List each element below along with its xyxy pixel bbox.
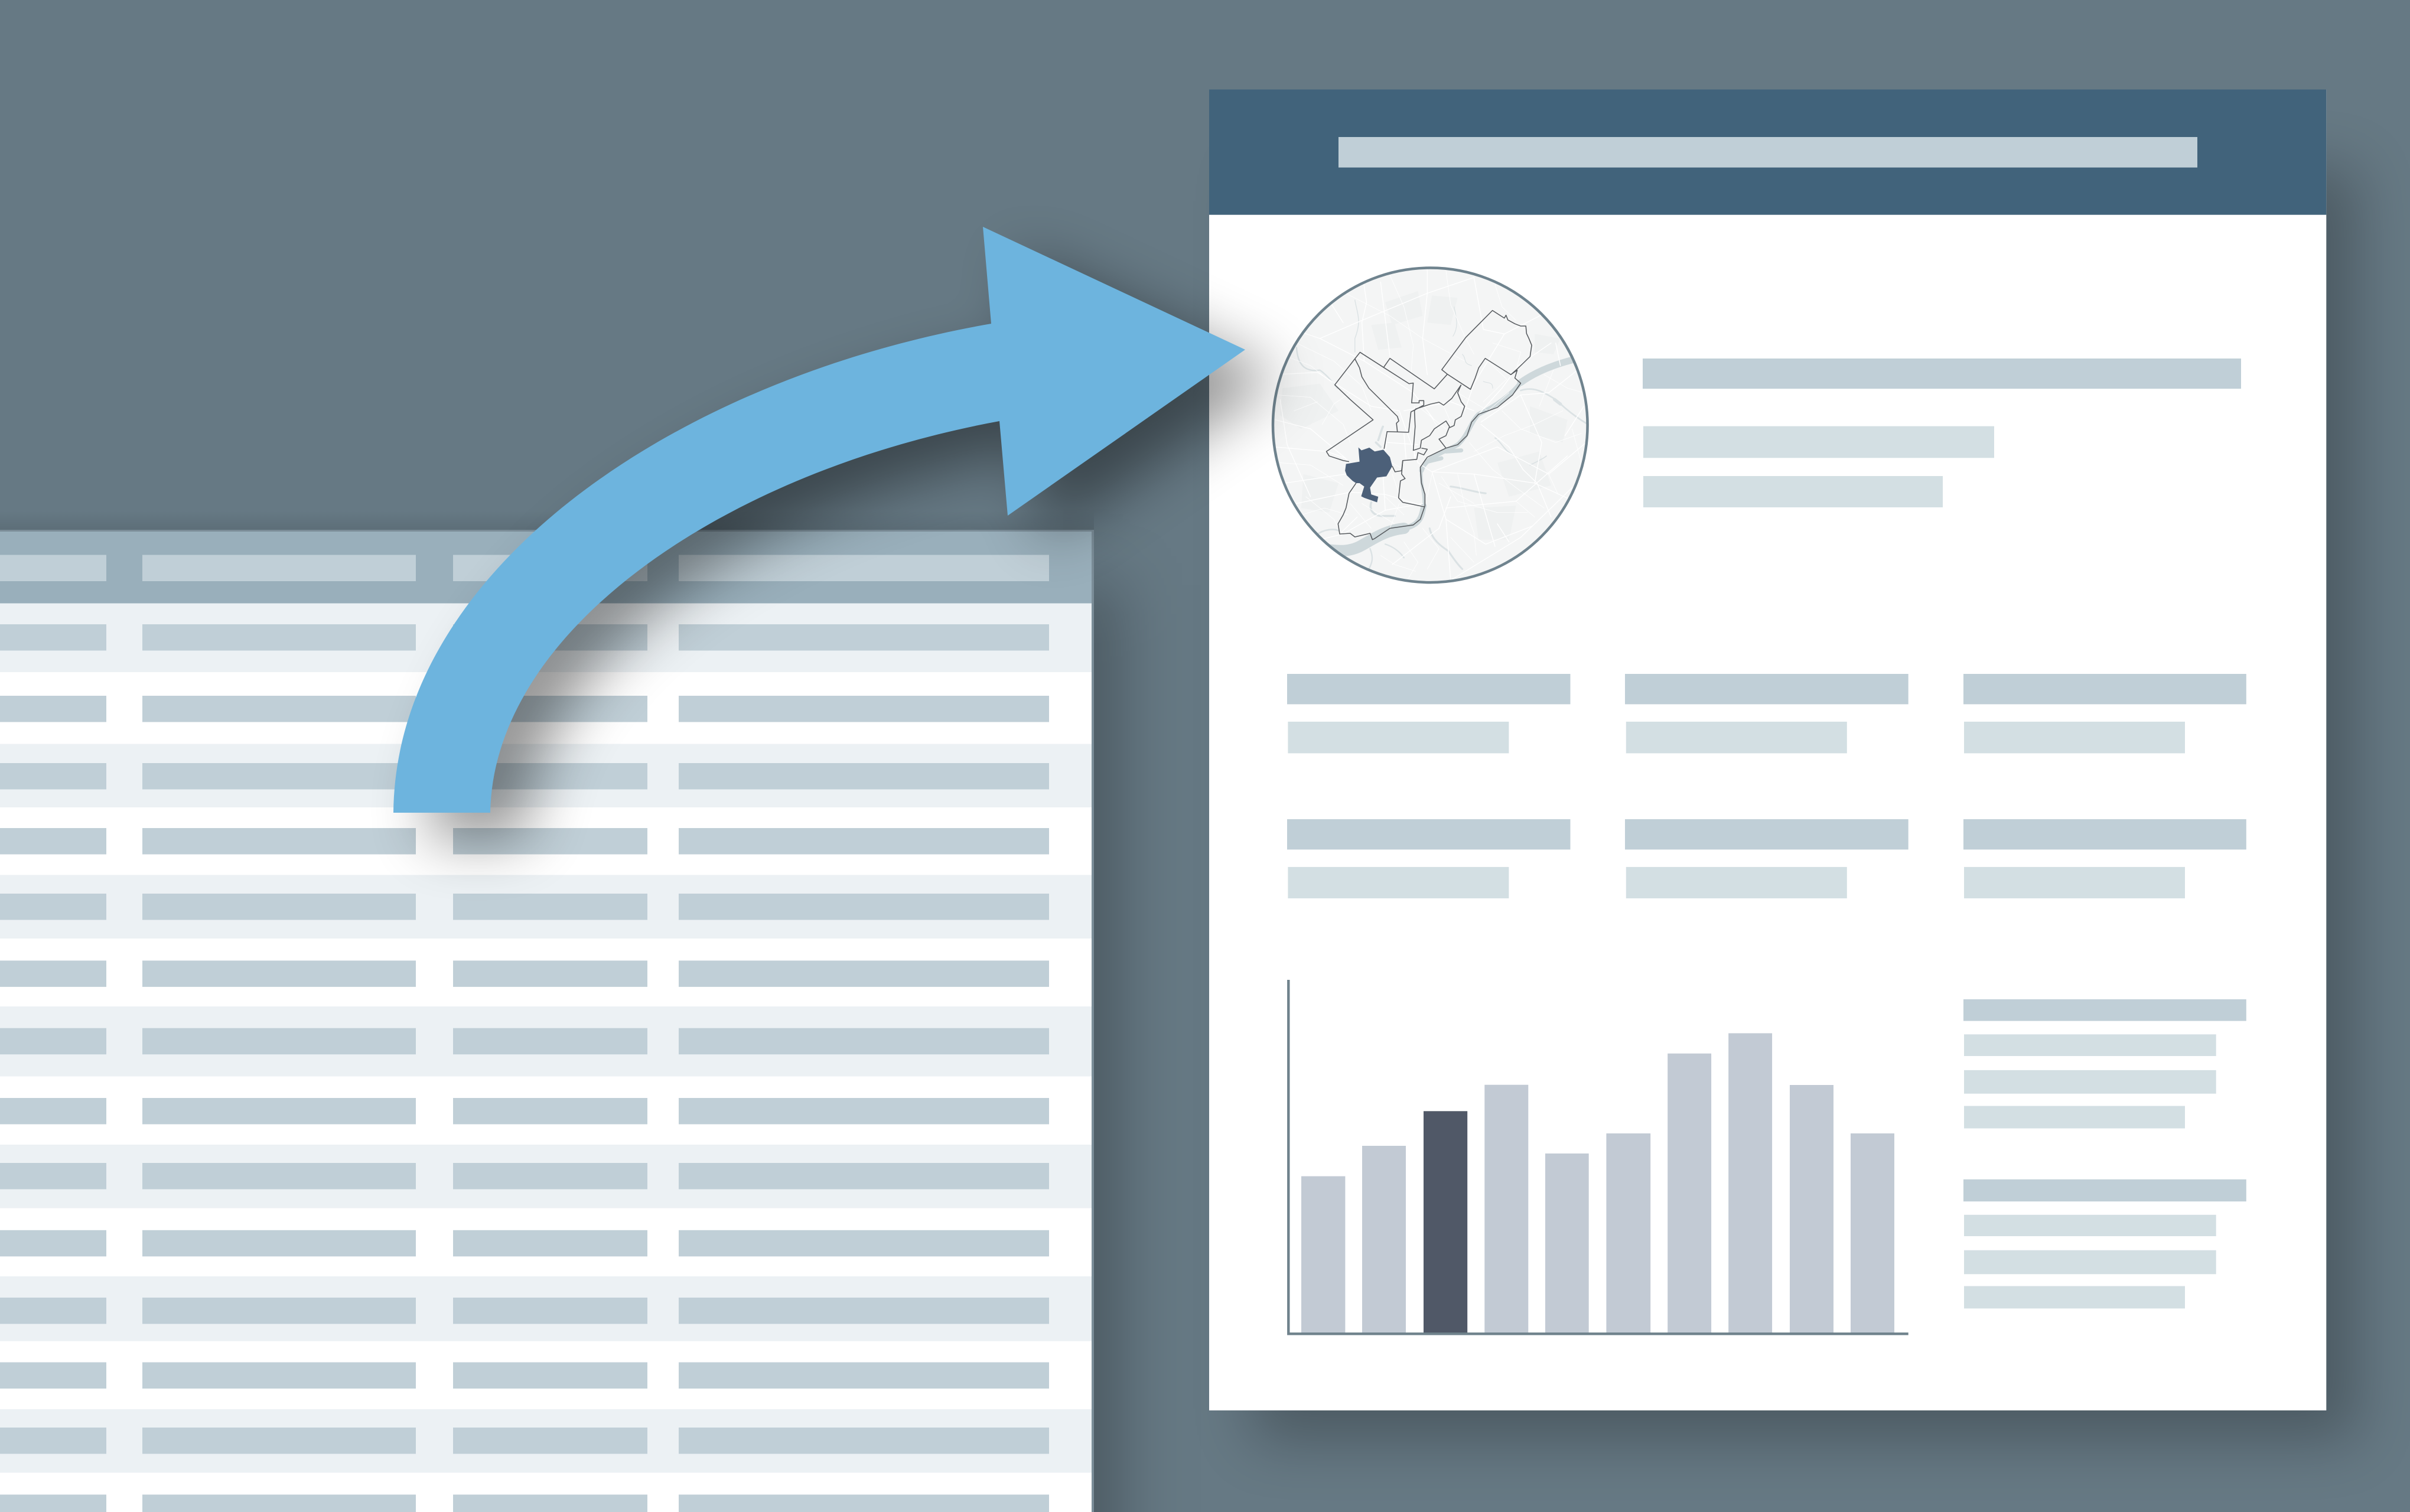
arrow (393, 227, 1245, 813)
table data placeholder bars (0, 624, 1049, 1512)
map roads major (1273, 268, 1586, 581)
panel: spreadsheet table (0, 530, 1094, 1512)
arrow shadow (429, 253, 1281, 839)
table header row (0, 532, 1092, 604)
map tributaries (1297, 300, 1586, 569)
bar chart (1288, 980, 1909, 1334)
shaded row bands (0, 604, 1092, 1473)
map highlighted district (1345, 448, 1392, 503)
chart axes (1288, 980, 1909, 1334)
map inset (1273, 268, 1588, 582)
report shadow (1252, 168, 2357, 1441)
map roads minor (1278, 271, 1584, 578)
chart bars (1301, 1033, 1894, 1332)
side list block 1 (1963, 999, 2246, 1128)
summary placeholder lines (1643, 359, 2241, 507)
map terrain patches (1280, 291, 1568, 540)
report title placeholder (1338, 137, 2197, 168)
table shadow (0, 496, 1211, 1512)
panel: report page (1209, 90, 2326, 1410)
side list block 2 (1963, 1179, 2246, 1308)
map district outlines (1327, 311, 1532, 540)
stat block row 1 (1287, 674, 2246, 753)
report header band (1209, 90, 2326, 215)
map water (1329, 359, 1577, 550)
stat block row 2 (1287, 819, 2246, 898)
